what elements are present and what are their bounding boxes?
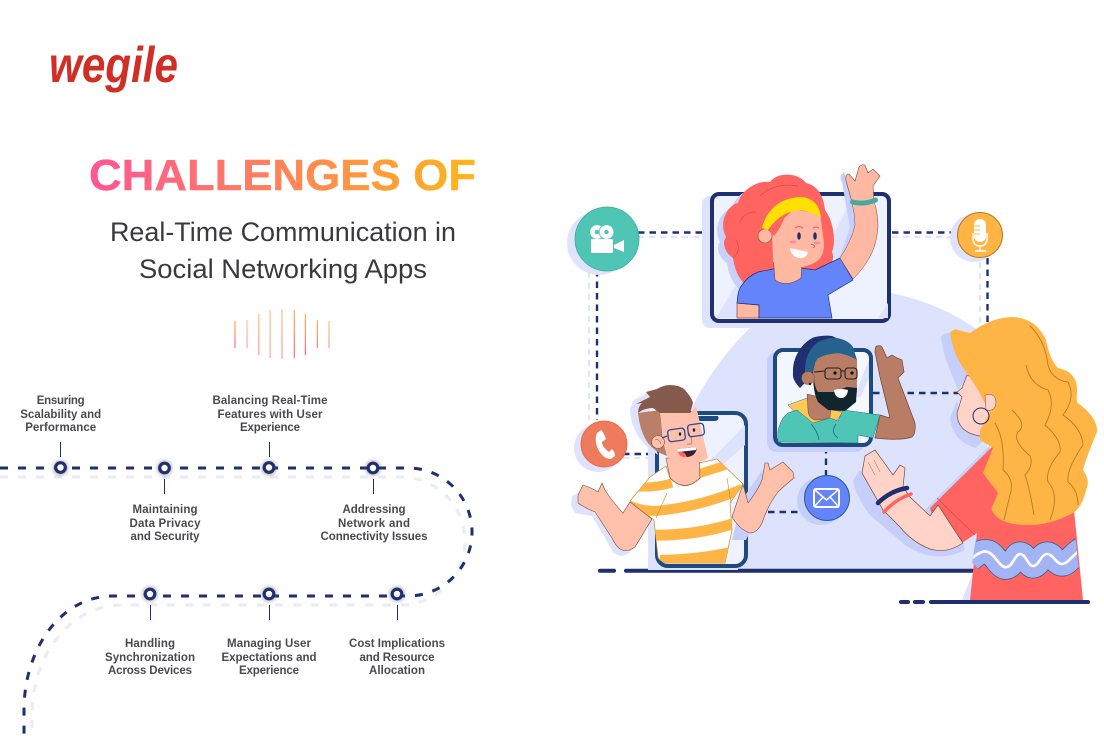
label: privacy [130,504,201,543]
label: network [320,504,428,543]
dress [930,447,1083,600]
icon: envelope [797,476,850,525]
figure: man with glasses [571,385,794,566]
panel: phone device [648,413,746,570]
subtitle: Social Networking Apps [139,254,427,284]
hair [950,317,1097,525]
floor line [600,569,980,573]
label: network: Network and [338,518,410,530]
decorative waveform bars [234,309,330,359]
icon: phone [574,421,627,472]
label: balancing: Features with User [218,409,323,421]
label: expectations: Experience [239,665,299,677]
glasses [662,423,705,442]
hair [636,385,693,413]
ear [985,394,996,410]
hoop earring [973,408,989,424]
label: scalability: Performance [25,422,96,434]
hair side [638,410,667,456]
arm [862,450,963,551]
figure: red-haired girl [717,165,880,318]
label: network: Addressing [342,504,406,516]
label: synchronization [105,638,195,677]
connectors [589,232,988,516]
label: balancing: Experience [240,422,300,434]
shadows [630,392,658,455]
label: expectations: Managing User [227,638,312,650]
labels [20,395,445,677]
label: cost: and Resource [360,652,434,664]
hair strands [995,326,1083,520]
dress wave band [970,549,1082,567]
label: synchronization: Across Devices [108,665,192,677]
right arm [732,462,794,533]
label: balancing: Balancing Real-Time [212,395,328,407]
mouth [677,447,697,457]
label: cost [349,638,445,677]
icon: microphone [950,212,1002,262]
face [957,375,995,438]
label: synchronization: Handling [125,638,175,650]
panel: bearded man frame [767,336,915,452]
lower floor line [901,600,1088,604]
label: network: Connectivity Issues [320,531,428,543]
panel: girl video frame [702,165,889,328]
label: cost: Cost Implications [349,638,445,650]
face [660,406,708,463]
illustration backdrop [648,288,990,570]
label: privacy: Data Privacy [130,518,201,530]
bracelets [878,488,907,503]
label: scalability: Ensuring [37,395,85,407]
label: scalability: Scalability and [20,409,101,421]
label: scalability [20,395,101,434]
striped shirt [628,459,743,566]
roadmap path [0,468,472,736]
label: privacy: and Security [130,531,200,543]
subtitle [110,217,456,284]
label: expectations [222,638,316,677]
figure: bearded man [778,336,915,443]
label: balancing [212,395,328,434]
logo: wegile: wegile [49,37,178,93]
left arm [578,483,652,551]
roadmap nodes and ticks [54,442,404,620]
label: privacy: Maintaining [132,504,198,516]
shadows [853,333,992,556]
title: CHALLENGES OF [89,151,476,200]
label: synchronization: Synchronization [105,652,195,664]
subtitle: Real-Time Communication in [110,217,456,247]
neck [666,458,700,486]
icon: video camera [567,207,639,275]
figure: woman with curly hair [853,317,1097,600]
label: expectations: Expectations and [222,652,316,664]
label: cost: Allocation [369,665,425,677]
